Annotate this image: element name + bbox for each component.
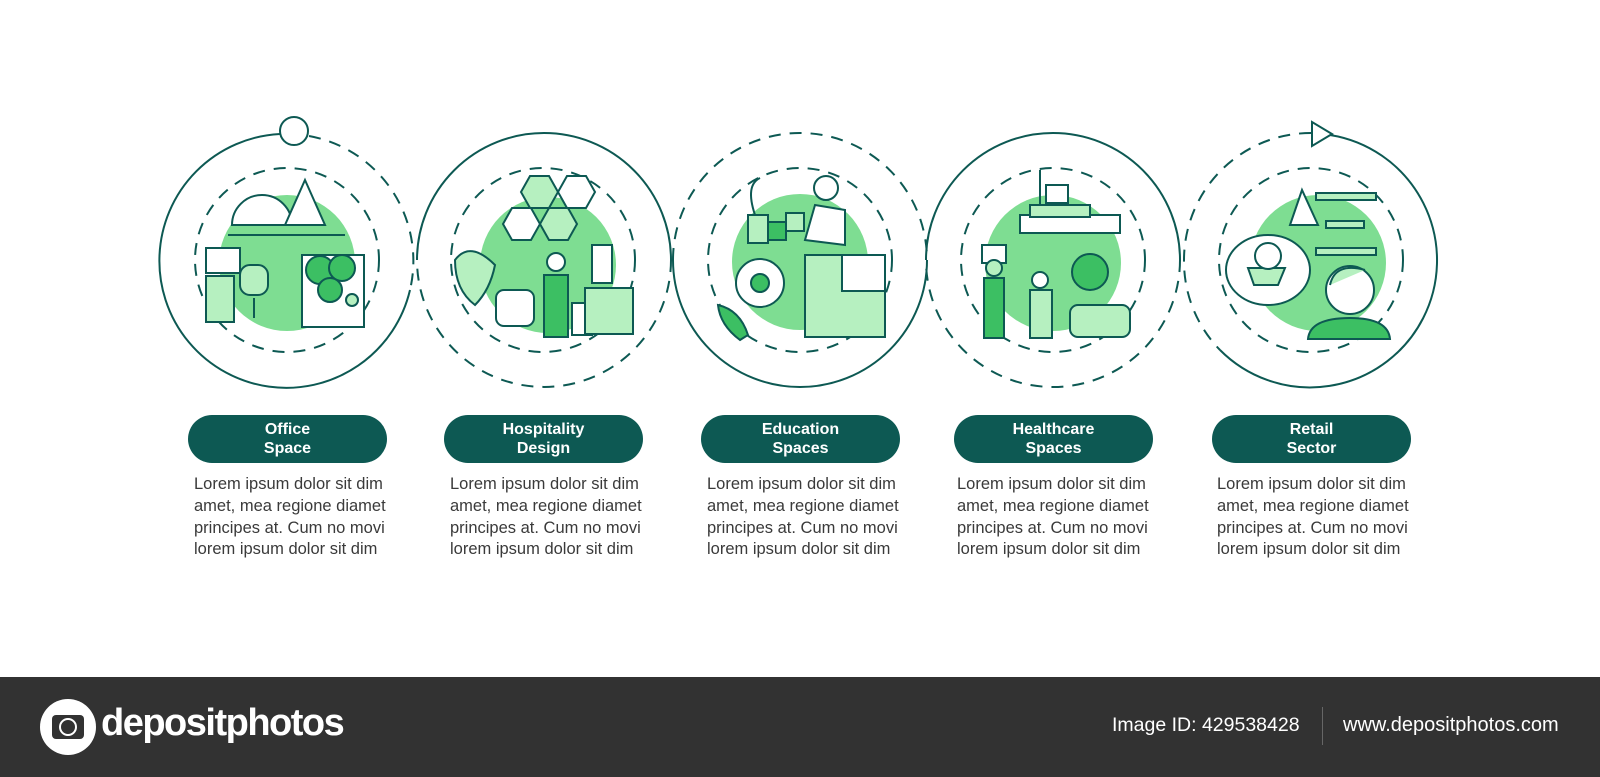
circle 4: healthcare — [926, 133, 1180, 387]
text: hospitality: Lorem ipsum dolor sit dim amet, mea regione diamet principes at. Cum no movi lorem ipsum dolor sit dim — [450, 475, 642, 558]
pill: Retail Sector: Retail — [1290, 421, 1333, 438]
pill: Healthcare Spaces — [954, 415, 1153, 463]
circle 2: hospitality — [417, 133, 671, 387]
text: education: Lorem ipsum dolor sit dim amet, mea regione diamet principes at. Cum no movi lorem ipsum dolor sit dim — [707, 475, 899, 558]
pill: Healthcare Spaces: Spaces — [1025, 440, 1082, 457]
pill: Office Space — [188, 415, 387, 463]
icon: healthcare — [982, 170, 1130, 338]
pill: Hospitality Design: Hospitality — [503, 421, 584, 438]
image id: Image ID: 429538428 — [1112, 714, 1300, 736]
divider — [1322, 707, 1323, 745]
url: www.depositphotos.com — [1343, 714, 1559, 736]
circle 1: office — [159, 117, 413, 388]
pill: Retail Sector: Sector — [1287, 440, 1336, 457]
icon: hospitality — [455, 176, 633, 337]
pill: Office Space: Space — [264, 440, 311, 457]
pill: Education Spaces — [701, 415, 900, 463]
footer bar — [0, 677, 1600, 777]
text: office: Lorem ipsum dolor sit dim amet, mea regione diamet principes at. Cum no movi lorem ipsum dolor sit dim — [194, 475, 386, 558]
logo icon — [40, 699, 96, 755]
text: retail: Lorem ipsum dolor sit dim amet, mea regione diamet principes at. Cum no movi lorem ipsum dolor sit dim — [1217, 475, 1409, 558]
pill: Hospitality Design: Design — [517, 440, 570, 457]
pill: Hospitality Design — [444, 415, 643, 463]
pill: Office Space: Office — [265, 421, 310, 438]
arrow: triangle — [1312, 122, 1332, 146]
circle 5: retail — [1184, 122, 1437, 387]
pill: Education Spaces: Spaces — [772, 440, 829, 457]
pill: Healthcare Spaces: Healthcare — [1013, 421, 1094, 438]
text: healthcare: Lorem ipsum dolor sit dim amet, mea regione diamet principes at. Cum no movi lorem ipsum dolor sit dim — [957, 475, 1149, 558]
circle 3: education — [673, 133, 927, 387]
pill: Education Spaces: Education — [762, 421, 839, 438]
logo text: depositphotos — [101, 702, 343, 744]
icon: retail — [1226, 190, 1390, 339]
icon: office items — [206, 180, 364, 327]
pill: Retail Sector — [1212, 415, 1411, 463]
icon: education — [718, 176, 885, 340]
